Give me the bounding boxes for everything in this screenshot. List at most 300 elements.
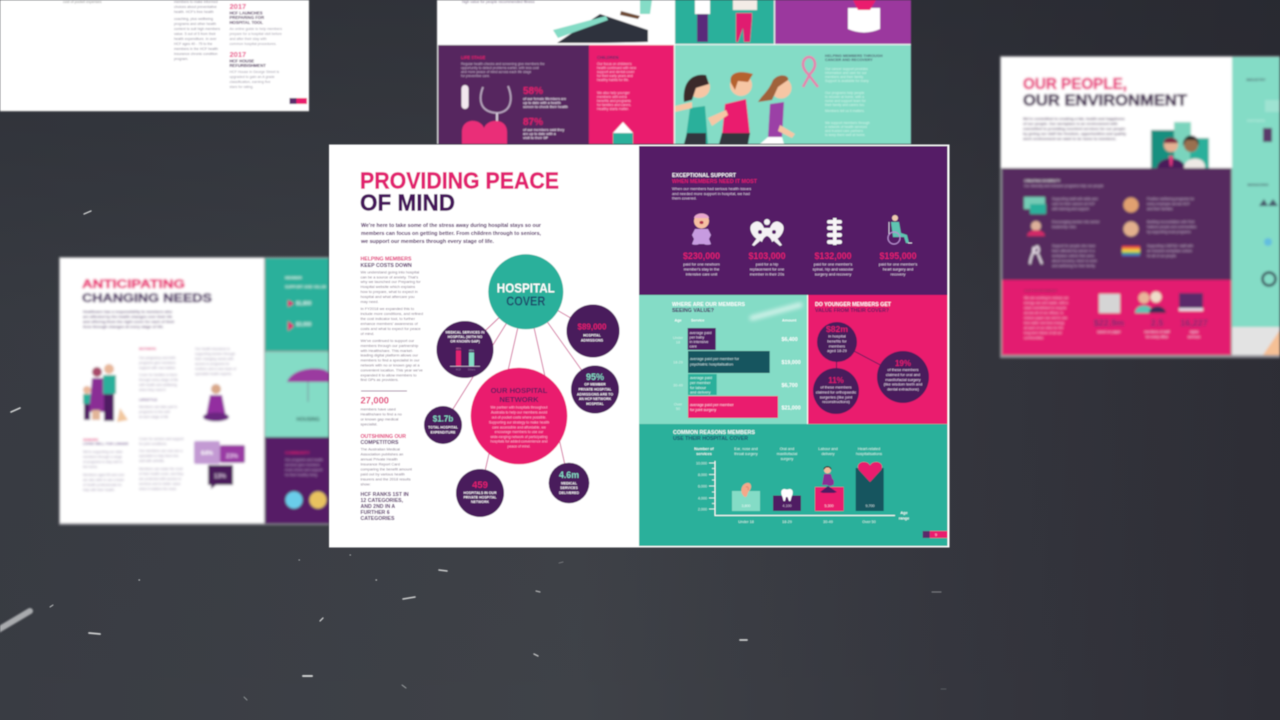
staff benefits text: workplace culture that cares <box>1052 254 1095 258</box>
category labels: Heart-related <box>858 447 880 451</box>
circle: medical services bar chart: HOSPITAL (WITH NO <box>448 335 483 339</box>
bar: under 18: Under <box>673 336 684 340</box>
statistics: 58% and 87%: of our members said they <box>523 128 564 132</box>
section: helping members: find GPs as providers. <box>360 377 399 382</box>
intro text: by giving our staff the freedom, opportunities and quality <box>1023 132 1127 136</box>
statistics: 58% and 87%: 58% <box>523 86 543 97</box>
panel text: mint: members and their family. <box>825 75 864 79</box>
illustration: woman stretching with mat <box>553 0 652 43</box>
timeline entry: 2017 house: HCF House in George Street is <box>230 70 279 74</box>
statistics: 58% and 87%: 87% <box>523 117 543 128</box>
heading: CHANGING NEEDS <box>82 291 212 305</box>
circle: 11%: 11% <box>828 376 844 385</box>
page tab <box>290 98 307 104</box>
bar: 18-29 <box>673 351 801 373</box>
intro text: committed to providing excellent services for our people <box>1023 127 1125 131</box>
age labels: 18-29 <box>782 520 792 524</box>
age labels: Over 50 <box>862 520 876 524</box>
section: helping members: network with no or known gap at a <box>360 362 420 368</box>
circle: 11%: reconstructions) <box>822 399 851 404</box>
bar: 18-29: $19,000 <box>782 360 801 366</box>
icon: speech bubbles: 64% <box>201 451 214 457</box>
pink panel text: energy use and waste, with a <box>1024 301 1068 305</box>
category labels: Labour and <box>818 447 838 451</box>
section text: their changing needs with <box>195 357 234 361</box>
circle: 95% admissions: ADMISSIONS ARE TO <box>577 392 613 396</box>
bar: 30-49 <box>815 487 844 511</box>
pink panel stats: 2.5 <box>1151 318 1163 328</box>
illustration: cake <box>848 0 880 32</box>
background page: top left brochure: cost of pocket expenses <box>63 0 102 4</box>
stat: 27,000: 27,000 <box>360 396 389 406</box>
category labels: delivery <box>821 452 835 456</box>
panel text: mint <box>825 54 883 137</box>
circle: our hospital network: wide-ranging network of participating <box>490 435 548 439</box>
stat: 132,000: spinal, hip and vascular <box>813 266 854 272</box>
category labels: throat surgery <box>734 452 758 456</box>
panel text: mint: information and care for our <box>825 71 868 75</box>
background page: our people, our environment <box>1000 56 1280 358</box>
circle: hospital cover: COVER <box>506 294 545 308</box>
teal sidebar: SUPPORT AND VALUE <box>285 285 327 289</box>
stat: 230,000: member's stay in the <box>684 266 719 272</box>
section: outshining our competitors: COMPETITORS <box>360 440 399 446</box>
bar: 30-49: per member <box>690 381 711 385</box>
category labels: Ear, nose and <box>734 447 758 451</box>
section: helping members: with Healthshare. This market- <box>360 348 414 353</box>
statistics: 58% and 87%: are up to date with a <box>523 132 556 136</box>
background page: top left brochure <box>0 0 309 112</box>
heading: USE THEIR HOSPITAL COVER <box>673 436 748 442</box>
circle: medical services bar chart: 86% <box>456 348 462 350</box>
section: helping members: can be a source of anxiety. That's <box>360 274 418 279</box>
text column: wellbeing programs: health. HCF's free health <box>174 10 214 14</box>
section: outshining our competitors: OUTSHINING OUR <box>360 434 406 440</box>
chart: services by age range: Number of <box>694 446 714 451</box>
teal sidebar <box>285 276 327 331</box>
circle: medical services bar chart: HCF <box>456 368 462 372</box>
section text lower: We're supporting our older <box>83 450 124 454</box>
bar: 30-49: 5,300 <box>824 504 834 508</box>
icon: speech bubbles <box>194 441 245 489</box>
category labels: maxillofacial <box>777 452 797 456</box>
stat: 132,000 <box>813 251 854 276</box>
chart axes <box>709 461 895 516</box>
circle: 95% admissions: AN HCF NETWORK <box>579 397 612 401</box>
bar: over 50: average paid per member <box>690 403 734 407</box>
callout: HCF ranks: CATEGORIES <box>360 516 395 522</box>
section: helping members: convenient location. This year we've <box>360 367 423 372</box>
section text: Our pregnancy and birth <box>139 356 176 360</box>
pink panel text: OUR ENVIRONMENT <box>1024 289 1058 293</box>
circle: 82m: members <box>829 344 845 348</box>
stat: 195,000 <box>879 251 917 276</box>
mint sidebar icons <box>1246 78 1280 286</box>
timeline entry: 2017 tool: common hospital procedures. <box>230 42 277 46</box>
staff benefits text: Supporting staff with skills and <box>1052 197 1098 201</box>
section: helping members: In FY2018 we expanded this to <box>360 306 414 311</box>
stat: 195,000: heart surgery and <box>883 266 913 272</box>
section text: mothers and a new team of <box>195 367 236 371</box>
panel text: mint: and trusted care partners <box>825 129 863 133</box>
mint sidebar icons: MANAGING <box>1247 183 1269 187</box>
title <box>360 168 559 216</box>
timeline entry: 2017 house <box>230 50 279 89</box>
circle: 95% admissions: PRIVATE HOSPITAL <box>578 388 612 392</box>
heading: OUR ENVIRONMENT <box>1023 92 1187 110</box>
circle: 1.7b expenditure: $1.7b <box>433 414 453 424</box>
section text lower: for joint conditions. <box>139 442 167 446</box>
axis labels: 10,000 <box>696 461 707 465</box>
purple panel text and dots: COMMUNITY <box>285 450 310 455</box>
stat: 230,000: $230,000 <box>683 251 720 261</box>
section text lower: when it matters the most. <box>139 487 177 491</box>
bar: over 50: 50 <box>676 407 680 411</box>
axis title: range <box>899 516 910 520</box>
stat: 103,000: replacement for one <box>750 266 784 272</box>
section: outshining our competitors: show: <box>360 482 371 486</box>
page number tab: 9 <box>935 533 937 537</box>
panel text: mint: their family and carers too. <box>825 103 865 107</box>
stat: 27,000: or known gap medical <box>360 416 398 421</box>
section: helping members <box>360 256 423 382</box>
statistics: 58% and 87%: up to date with a health <box>523 101 561 105</box>
bar: 30-49: average paid <box>690 376 712 380</box>
heading: OUR PEOPLE, <box>1023 76 1127 93</box>
section text: Members can take part in <box>139 405 177 409</box>
purple panel text and dots: more choice and support <box>285 468 322 472</box>
panel text: pink: CHILDREN <box>597 55 619 60</box>
axis title: Age <box>900 510 909 515</box>
pink panel text: reduce paper use and to use <box>1024 316 1067 320</box>
stat: 27,000: Healthshare to find a no <box>360 411 402 416</box>
panel text: left purple: and more peace of mind across each life stage <box>461 70 531 74</box>
timeline entry: 2017 tool: An online guide to help members <box>230 27 282 31</box>
icon: baby <box>692 214 711 245</box>
heading: ANTICIPATING <box>82 277 185 291</box>
panel text: mint: to keep them well at home. <box>825 133 866 137</box>
panel: do younger members get value <box>808 295 948 423</box>
stat: 27,000 <box>360 396 402 426</box>
section text lower: of health professionals for <box>83 483 123 487</box>
section text lower: of their health cover, and they <box>139 472 184 476</box>
intro text: members can focus on getting better. From children through to seniors, <box>361 231 541 237</box>
stat: 103,000 <box>748 251 786 276</box>
section text lower: of programs to stay well in <box>83 460 122 464</box>
icon: spine <box>827 218 842 245</box>
section text: programs give members <box>139 361 176 365</box>
section text lower: are also able to use a team <box>83 478 124 482</box>
category labels: hospitalisations <box>856 452 882 456</box>
stat: 103,000: paid for a hip <box>756 262 778 266</box>
pink panel stats: members of staff <box>1144 330 1170 334</box>
panel text: pink: We also help younger <box>597 91 631 95</box>
stat: 103,000: member in their 20s <box>750 272 784 276</box>
bar: under 18: 18 <box>676 340 680 344</box>
heading <box>82 277 212 305</box>
staff benefits text: Building reconciliation with First <box>1147 220 1194 224</box>
statistics: 58% and 87%: visit to their GP <box>523 136 549 140</box>
age labels: 30-49 <box>823 520 833 524</box>
panel text: mint: Support is available for many <box>825 79 869 83</box>
section text lower: help with their health. <box>83 488 115 492</box>
category labels: Oral and <box>780 447 794 451</box>
heading <box>1023 76 1187 110</box>
pink panel stats: for every office <box>1146 335 1168 339</box>
axis labels: 2,000 <box>698 507 707 511</box>
circle: 4.6m services: MEDICAL <box>561 482 578 486</box>
timeline entry: 2017 house: 2017 <box>230 50 246 59</box>
section text lower: specialist to help them live <box>139 454 179 458</box>
section: helping members: how to prepare, what to expect in <box>360 289 418 294</box>
panel text: pink: for their early years and <box>597 74 633 78</box>
panel: where are our members seeing value <box>639 295 807 423</box>
bar: under 18: in intensive <box>690 340 708 344</box>
circle: our hospital network: NETWORK <box>499 395 539 404</box>
teal sidebar: $3,000 <box>296 322 312 328</box>
stat: 230,000 <box>683 251 720 276</box>
panel: left page <box>360 168 620 522</box>
section: helping members: may need. <box>360 299 379 304</box>
background page: anticipating changing needs <box>59 257 329 525</box>
section text: at each stage of life <box>139 415 169 419</box>
bar: 30-49 <box>673 374 798 395</box>
section: outshining our competitors <box>360 434 413 486</box>
staff benefits text: care for their careers at HCF <box>1052 202 1095 206</box>
circle: 19%: (like wisdom teeth and <box>884 382 922 386</box>
panel text: mint: Members tell us it matters. <box>825 109 865 113</box>
panel text: mint: We support members through <box>825 121 870 125</box>
circle: medical services bar chart: OR KNOWN GAP) <box>450 339 480 343</box>
circle: our hospital network: peace of mind. <box>508 445 531 449</box>
purple panel text and dots: services give members <box>285 463 320 467</box>
bar: 18-29 <box>773 496 801 511</box>
section: helping members: We've continued to support our <box>360 338 415 343</box>
staff benefits text: been affected by cancer in a <box>1052 249 1095 253</box>
section: outshining our competitors: comparing the benefit amount <box>360 466 413 472</box>
bar: 18-29: average paid per member for <box>690 357 740 361</box>
bar: under 18: average paid <box>690 331 711 335</box>
circle: 82m: aged 18-29 <box>827 348 847 353</box>
pink panel stats: services <box>1188 335 1201 339</box>
mint sidebar icons: INDUSTRY <box>1246 78 1266 82</box>
section: helping members: leading digital platform allows our <box>360 353 419 358</box>
purple panel text and dots: Our programs and health <box>285 458 323 462</box>
section text lower: Our members can now see a <box>139 449 183 453</box>
panel text: left purple: for preventive care. <box>461 74 490 78</box>
circle: 19%: of these members <box>887 367 919 372</box>
circle: 89,000 admissions: ADMISSIONS <box>581 338 604 342</box>
section: helping members: enhance members' awareness of <box>360 321 419 326</box>
panel text: mint: CANCER AND RECOVERY <box>825 58 873 62</box>
heading <box>815 302 892 314</box>
bar: over 50: 9,700 <box>866 504 874 508</box>
section text lower: the home. <box>83 465 98 469</box>
stat: 27,000: members have used <box>360 406 396 411</box>
bar: over 50: $21,000 <box>782 406 801 412</box>
section text: access to programs for <box>195 362 230 366</box>
intro text: lives through changes at every stage of life. <box>83 324 164 329</box>
circle: 95% admissions <box>571 366 619 414</box>
bar: over 50 <box>674 396 801 418</box>
icon: pregnant woman <box>820 466 837 493</box>
text column: wellbeing programs: coaching, plus wellbeing <box>174 17 213 21</box>
staff benefits text: Nations people and communities <box>1147 225 1196 229</box>
text column: wellbeing programs: HCF ages 40 - 75 to the <box>174 42 212 46</box>
axis labels: 4,000 <box>698 496 707 500</box>
staff benefits text: and wellbeing for their family <box>1052 264 1095 268</box>
panel text: left purple: Regular health checks and screening give members the <box>461 62 545 66</box>
callout: HCF ranks: AND 2ND IN A <box>360 504 395 510</box>
heading: When our members had serious health issues <box>672 186 751 191</box>
staff benefits text: and their families <box>1147 207 1173 211</box>
staff benefits text: CREATING DIVERSITY <box>1024 179 1061 183</box>
table headers: Amount <box>782 318 797 322</box>
circle: 19% <box>877 351 929 403</box>
staff benefits text: for all of our people <box>1147 254 1176 258</box>
panel text: pink: members with extra <box>597 95 627 99</box>
section text: Our health insurance is <box>195 347 230 351</box>
panel text: mint: to recover at home, with a <box>825 95 864 99</box>
pink panel stats: saved on paper <box>1097 330 1122 334</box>
circle: 89,000 admissions <box>566 304 620 358</box>
staff benefit icons <box>1024 197 1140 264</box>
section text lower: SENIORS <box>83 438 99 442</box>
section: helping members: expanded it to allow members to <box>360 372 417 377</box>
pink panel stats: $22.9m <box>1094 318 1124 328</box>
panel text: left purple: LIFE STAGE <box>461 55 486 60</box>
section: outshining our competitors: annual Private Health <box>360 456 398 462</box>
illustration: running family <box>675 72 795 144</box>
staff benefits text: Support for people who have <box>1052 244 1095 248</box>
panel text: left purple: opportunity to detect problems earlier, with less cost <box>461 66 539 70</box>
timeline entry: 2017 tool: HCF LAUNCHES <box>230 10 263 16</box>
pink panel text: less water and less energy <box>1024 321 1064 325</box>
circle: 82m <box>817 322 857 362</box>
circle: 4.6m services <box>549 463 589 503</box>
icons: thermometer, stethoscope and heart <box>462 85 511 144</box>
section text: specialist health experts. <box>195 372 232 376</box>
bar: 30-49: and delivery <box>690 390 711 394</box>
bar: 18-29: psychiatric hospitalisation <box>690 362 733 366</box>
page number tab <box>923 531 948 538</box>
bar: 30-49: $6,700 <box>782 383 798 389</box>
pink panel text: communities. <box>1024 336 1044 340</box>
heading: and needed more support in hospital, we had <box>672 191 750 196</box>
staff benefits text: by supporting local programs <box>1147 230 1191 234</box>
icon: speech bubbles: 23% <box>226 454 239 460</box>
stat: 132,000: surgery and recovery <box>815 272 851 276</box>
circle: 11%: of these members <box>820 384 852 390</box>
text column: wellbeing programs: insurance chronic condition <box>174 52 218 56</box>
stat: 195,000: paid for one member's <box>879 262 917 266</box>
circle: 459 hospitals <box>456 469 504 517</box>
section: helping members: hospital and what aftercare you <box>360 294 415 299</box>
mint sidebar icons: PARTNERS <box>1247 119 1266 123</box>
icon: milk carton <box>613 122 633 144</box>
purple panel text and dots: for their healthy living <box>285 473 317 477</box>
icon: umbrella <box>287 369 329 423</box>
timeline entry: 2017 house: classification, earning five <box>230 80 270 84</box>
circle: hospital cover <box>488 254 563 329</box>
background page: top centre brochure: high value for people recommended fitness <box>462 0 535 4</box>
chart: services by age range <box>694 446 910 524</box>
section text lower: Members aged 55 and over <box>83 473 125 477</box>
teal sidebar: $1,800 <box>296 301 312 307</box>
section: helping members: of mind. <box>360 331 374 336</box>
circle: 19%: 19% <box>895 359 911 368</box>
panel: common reasons members use hospital cover <box>639 422 948 546</box>
panel: exceptional support <box>639 146 948 295</box>
section: helping members: HELPING MEMBERS <box>360 256 412 262</box>
section: helping members: include more conditions, and refined <box>360 311 423 316</box>
section text lower: services and to better value <box>139 482 181 486</box>
icon: ear <box>741 483 751 497</box>
statistics: 58% and 87% <box>523 86 568 140</box>
heading: WHEN MEMBERS NEED IT MOST <box>672 179 758 185</box>
section: helping members: members to find a specialist in our <box>360 358 420 363</box>
icon: wheelchair <box>888 215 912 244</box>
section: helping members: members through our partnership <box>360 343 418 348</box>
panel text: mint: a network of health services <box>825 125 867 129</box>
illustration: doctor and patient <box>695 0 757 42</box>
section text: with health and wellbeing <box>139 383 177 387</box>
circle: 89,000 admissions: HOSPITAL <box>583 334 602 338</box>
section text: Cover for families is there <box>139 373 178 377</box>
intro text: are affected by the health changes over their life <box>83 314 173 319</box>
panel text: pink: Healthy starts matter. <box>597 107 629 111</box>
section: helping members: costs and what to expect for peace <box>360 326 421 331</box>
circle: 4.6m services: 4.6m <box>559 470 579 480</box>
text column: wellbeing programs: programs and other health <box>174 22 216 26</box>
section: helping members: KEEP COSTS DOWN <box>360 263 412 269</box>
bar: under 18: per baby <box>690 336 704 340</box>
circle: 95% admissions: HOSPITAL <box>586 402 605 406</box>
section text: supporting women through <box>195 352 235 356</box>
category labels: surgery <box>781 457 793 461</box>
statistics: 58% and 87%: of our female Members are <box>523 97 566 101</box>
panel text: pink: Our focus on children's <box>597 62 632 66</box>
section text: LIFESTYLE <box>139 398 158 402</box>
circle: 95% admissions: 95% <box>586 372 604 382</box>
text column: wellbeing programs: content to suit high members <box>174 27 220 31</box>
pink panel stats: 16,227 <box>1180 318 1208 328</box>
pink panel stats <box>1094 292 1208 339</box>
circle: hospital cover: HOSPITAL <box>497 282 555 296</box>
stat: 195,000: recovery <box>891 272 906 276</box>
staff benefits text: an inclusive workplace culture <box>1147 249 1192 253</box>
table headers: Service <box>691 318 705 322</box>
circle: 4.6m services: DELIVERED <box>559 491 579 495</box>
intro text: and offering them the right cover for each of their <box>83 319 175 324</box>
section text: programs to live well <box>139 410 170 414</box>
callout: HCF ranks: 12 CATEGORIES, <box>360 498 404 504</box>
circle: 1.7b expenditure <box>424 406 462 444</box>
heading: them covered. <box>672 196 697 200</box>
section text: through every stage of life <box>139 378 178 382</box>
chart: services by age range: services <box>696 451 712 456</box>
bar: 30-49: 30-49 <box>673 384 683 388</box>
circle: 4.6m services: SERVICES <box>560 486 578 490</box>
section text: MOTHERS <box>139 347 157 351</box>
bar: over 50: Over <box>674 402 683 406</box>
light glare <box>752 305 800 318</box>
bar: under 18 <box>673 328 798 350</box>
background page: top centre brochure <box>437 0 911 144</box>
timeline entry: 2017 house: stars for rating. <box>230 85 253 89</box>
stat: 230,000: paid for one newborn <box>683 262 720 266</box>
text column: wellbeing programs: choices about preventative <box>174 5 217 9</box>
